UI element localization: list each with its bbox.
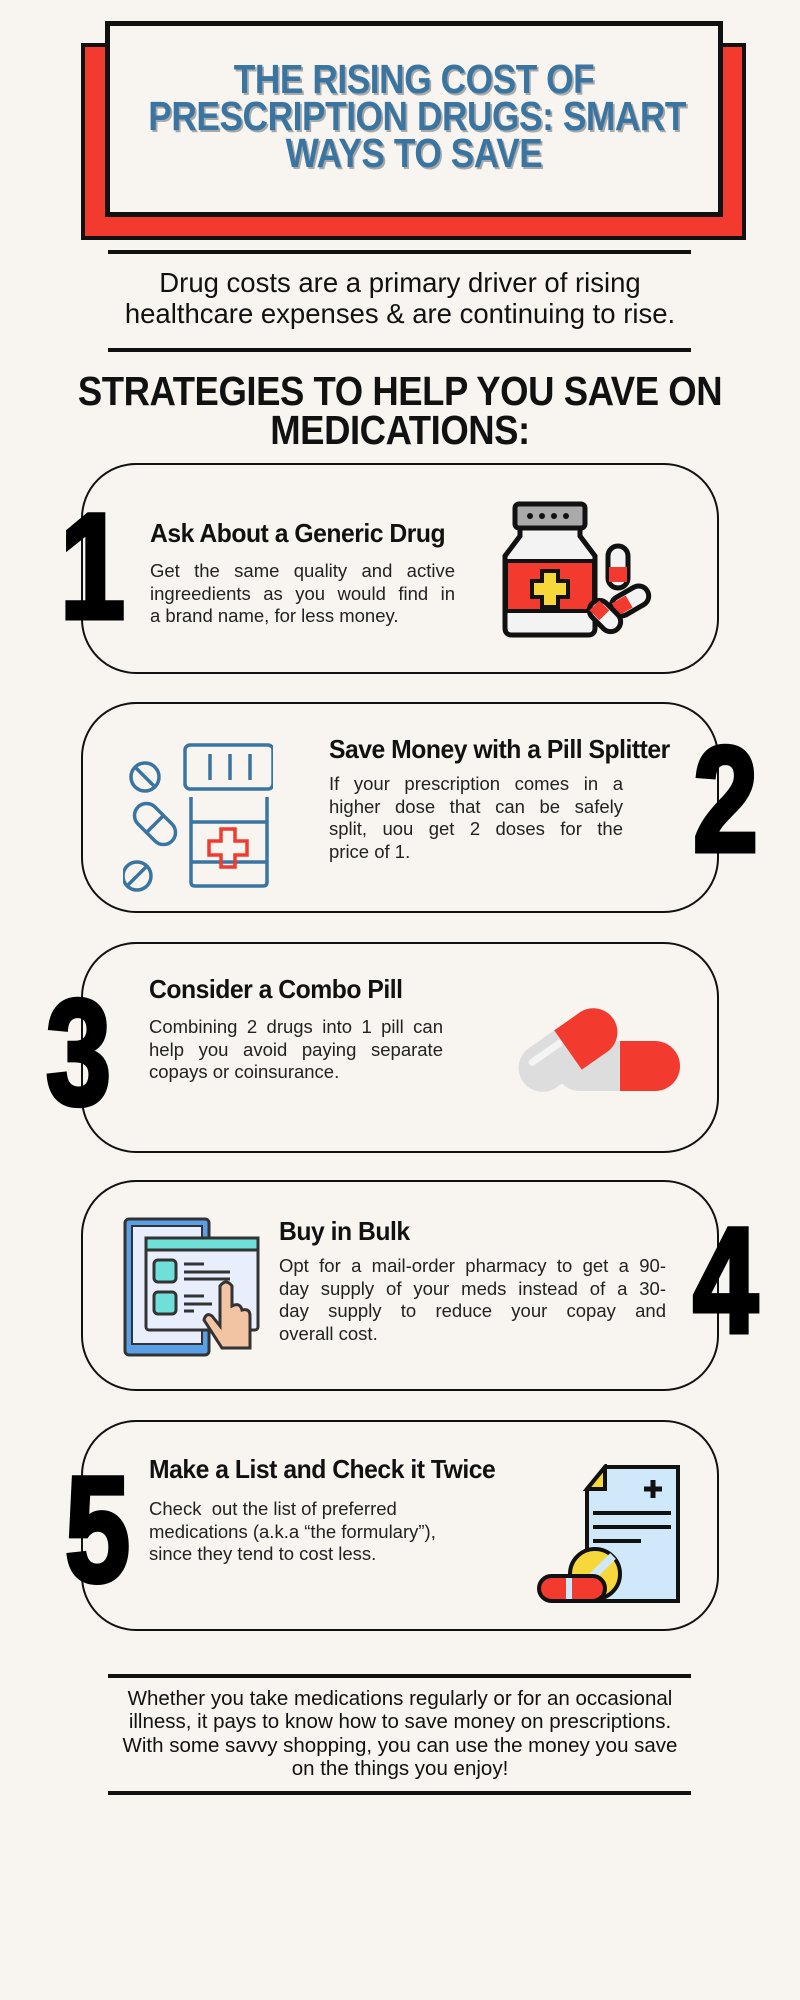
body: ingreedients as you would find in: [150, 583, 455, 604]
closing text: illness, it pays to know how to save money on prescriptions.: [129, 1710, 671, 1733]
body: day supply of your meds instead of a 30-: [279, 1278, 666, 1299]
closing text: With some savvy shopping, you can use the money you save: [123, 1734, 677, 1757]
closing text: Whether you take medications regularly or for an occasional: [128, 1687, 672, 1710]
icon: pill bottle: [502, 502, 652, 638]
number 3: 3: [46, 968, 111, 1136]
card 3: combo pill: [46, 942, 719, 1153]
body: Get the same quality and active: [150, 560, 455, 581]
body: [149, 1498, 436, 1564]
heading: Ask About a Generic Drug: [150, 518, 445, 548]
title text: PRESCRIPTION DRUGS: SMART: [148, 93, 686, 139]
body: day supply to reduce your copay and: [279, 1300, 666, 1321]
body: [149, 1016, 443, 1082]
body: Opt for a mail-order pharmacy to get a 90-: [279, 1255, 666, 1276]
heading: Save Money with a Pill Splitter: [329, 734, 670, 764]
body: medications (a.k.a “the formulary”),: [149, 1521, 436, 1542]
body: [329, 773, 624, 862]
number 1: 1: [60, 482, 125, 650]
icon: capsules: [518, 1008, 680, 1092]
icon: prescription sheet with pills: [537, 1464, 680, 1603]
closing text: on the things you enjoy!: [292, 1757, 508, 1780]
title text: THE RISING COST OF: [234, 56, 594, 102]
body: overall cost.: [279, 1323, 378, 1344]
heading: Make a List and Check it Twice: [149, 1454, 495, 1484]
card 4: buy in bulk: [81, 1180, 719, 1391]
heading: Consider a Combo Pill: [149, 974, 403, 1004]
icon: tablet with pharmacy list: [124, 1218, 260, 1356]
card 5: formulary list: [65, 1420, 719, 1631]
heading: Buy in Bulk: [279, 1216, 410, 1246]
white title box: [105, 21, 723, 217]
section heading: [78, 368, 722, 453]
number 2: 2: [693, 715, 758, 883]
intro text: healthcare expenses & are continuing to rise.: [125, 298, 675, 329]
icon: outline bottle and pills: [123, 743, 273, 892]
body: price of 1.: [329, 841, 410, 862]
title banner: [81, 21, 746, 240]
body: Check out the list of preferred: [149, 1498, 397, 1519]
body: help you avoid paying separate: [149, 1039, 443, 1060]
section heading: STRATEGIES TO HELP YOU SAVE ON: [78, 368, 722, 414]
number 4: 4: [693, 1196, 758, 1364]
title text: WAYS TO SAVE: [286, 130, 542, 176]
body: since they tend to cost less.: [149, 1543, 376, 1564]
body: copays or coinsurance.: [149, 1061, 339, 1082]
intro text: [125, 267, 675, 329]
red backing box: [81, 43, 746, 240]
intro text: Drug costs are a primary driver of rising: [159, 267, 641, 298]
title text: [148, 56, 688, 176]
body: split, uou get 2 doses for the: [329, 818, 623, 839]
body: If your prescription comes in a: [329, 773, 623, 794]
section heading: MEDICATIONS:: [270, 407, 530, 453]
closing text: [122, 1687, 677, 1780]
number 5: 5: [65, 1445, 130, 1613]
body: higher dose that can be safely: [329, 796, 623, 817]
body: a brand name, for less money.: [150, 605, 399, 626]
card 1: generic drug: [60, 463, 719, 674]
card 2: pill splitter: [81, 702, 719, 913]
body: Combining 2 drugs into 1 pill can: [149, 1016, 443, 1037]
body: [279, 1255, 666, 1344]
body: [150, 560, 455, 626]
